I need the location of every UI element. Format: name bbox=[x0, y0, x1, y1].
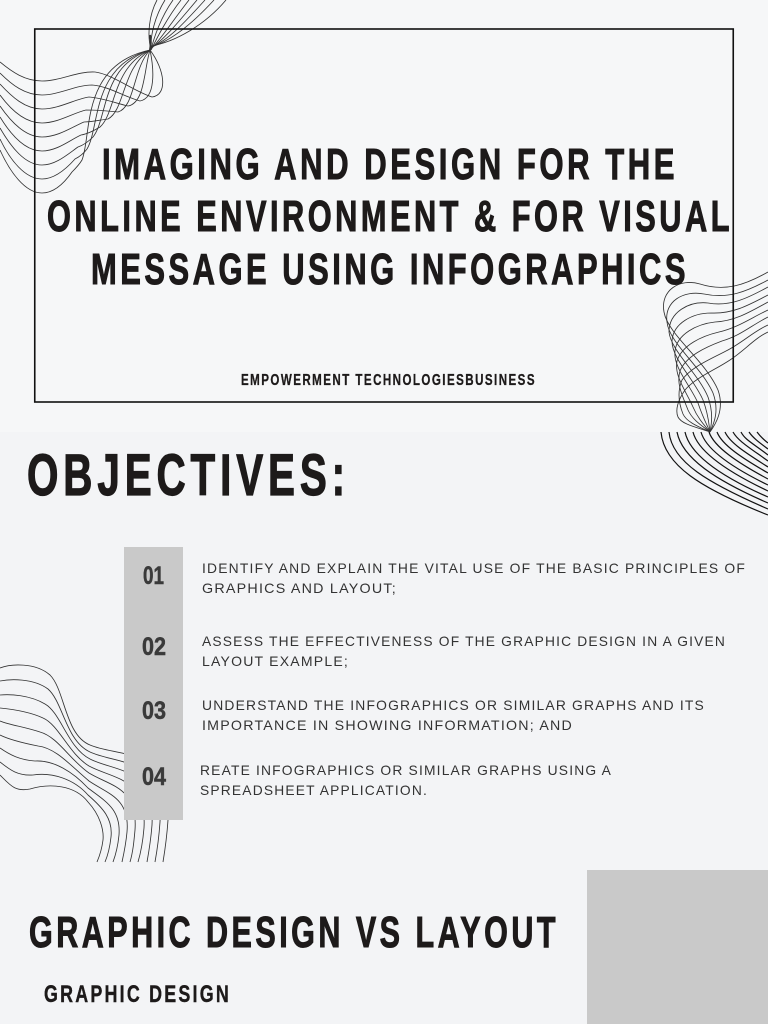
objective 3 text: UNDERSTAND THE INFOGRAPHICS OR SIMILAR GRAPHS AND ITS bbox=[202, 697, 705, 713]
objective 1 text: IDENTIFY AND EXPLAIN THE VITAL USE OF THE BASIC PRINCIPLES OF bbox=[202, 560, 746, 576]
decorative wave: left of list bbox=[0, 665, 168, 862]
panel: numbered bar: 02 bbox=[142, 633, 166, 661]
panel: numbered bar: 04 bbox=[142, 763, 166, 791]
objective 1 text: GRAPHICS AND LAYOUT; bbox=[202, 580, 397, 596]
objective 4 text: REATE INFOGRAPHICS OR SIMILAR GRAPHS USING A bbox=[200, 762, 612, 778]
subtitle: EMPOWERMENT TECHNOLOGIESBUSINESS bbox=[241, 372, 536, 389]
subheading: graphic design: GRAPHIC DESIGN bbox=[44, 981, 231, 1008]
objective 3 text: IMPORTANCE IN SHOWING INFORMATION; AND bbox=[202, 717, 573, 733]
background: lower section bbox=[0, 432, 768, 1024]
objective 4 text: SPREADSHEET APPLICATION. bbox=[200, 782, 428, 798]
objective 2 text: LAYOUT EXAMPLE; bbox=[202, 653, 349, 669]
heading: objectives: OBJECTIVES: bbox=[27, 443, 350, 508]
grey block bottom right bbox=[587, 870, 768, 1024]
panel: numbered bar: 01 bbox=[143, 562, 164, 590]
panel: numbered bar bbox=[124, 547, 183, 820]
decorative wave: right of frame bbox=[663, 272, 768, 432]
objective 1 text bbox=[202, 560, 746, 596]
objective 2 text: ASSESS THE EFFECTIVENESS OF THE GRAPHIC DESIGN IN A GIVEN bbox=[202, 633, 726, 649]
objective 3 text bbox=[202, 697, 705, 733]
decorative wave: top left bbox=[0, 0, 226, 193]
decorative wave: top right of objectives bbox=[661, 432, 768, 515]
objective 4 text bbox=[200, 762, 612, 798]
title frame bbox=[35, 29, 733, 402]
background: top section bbox=[0, 0, 768, 432]
title bbox=[47, 140, 733, 294]
objective 2 text bbox=[202, 633, 726, 669]
panel: numbered bar: 03 bbox=[142, 697, 166, 725]
